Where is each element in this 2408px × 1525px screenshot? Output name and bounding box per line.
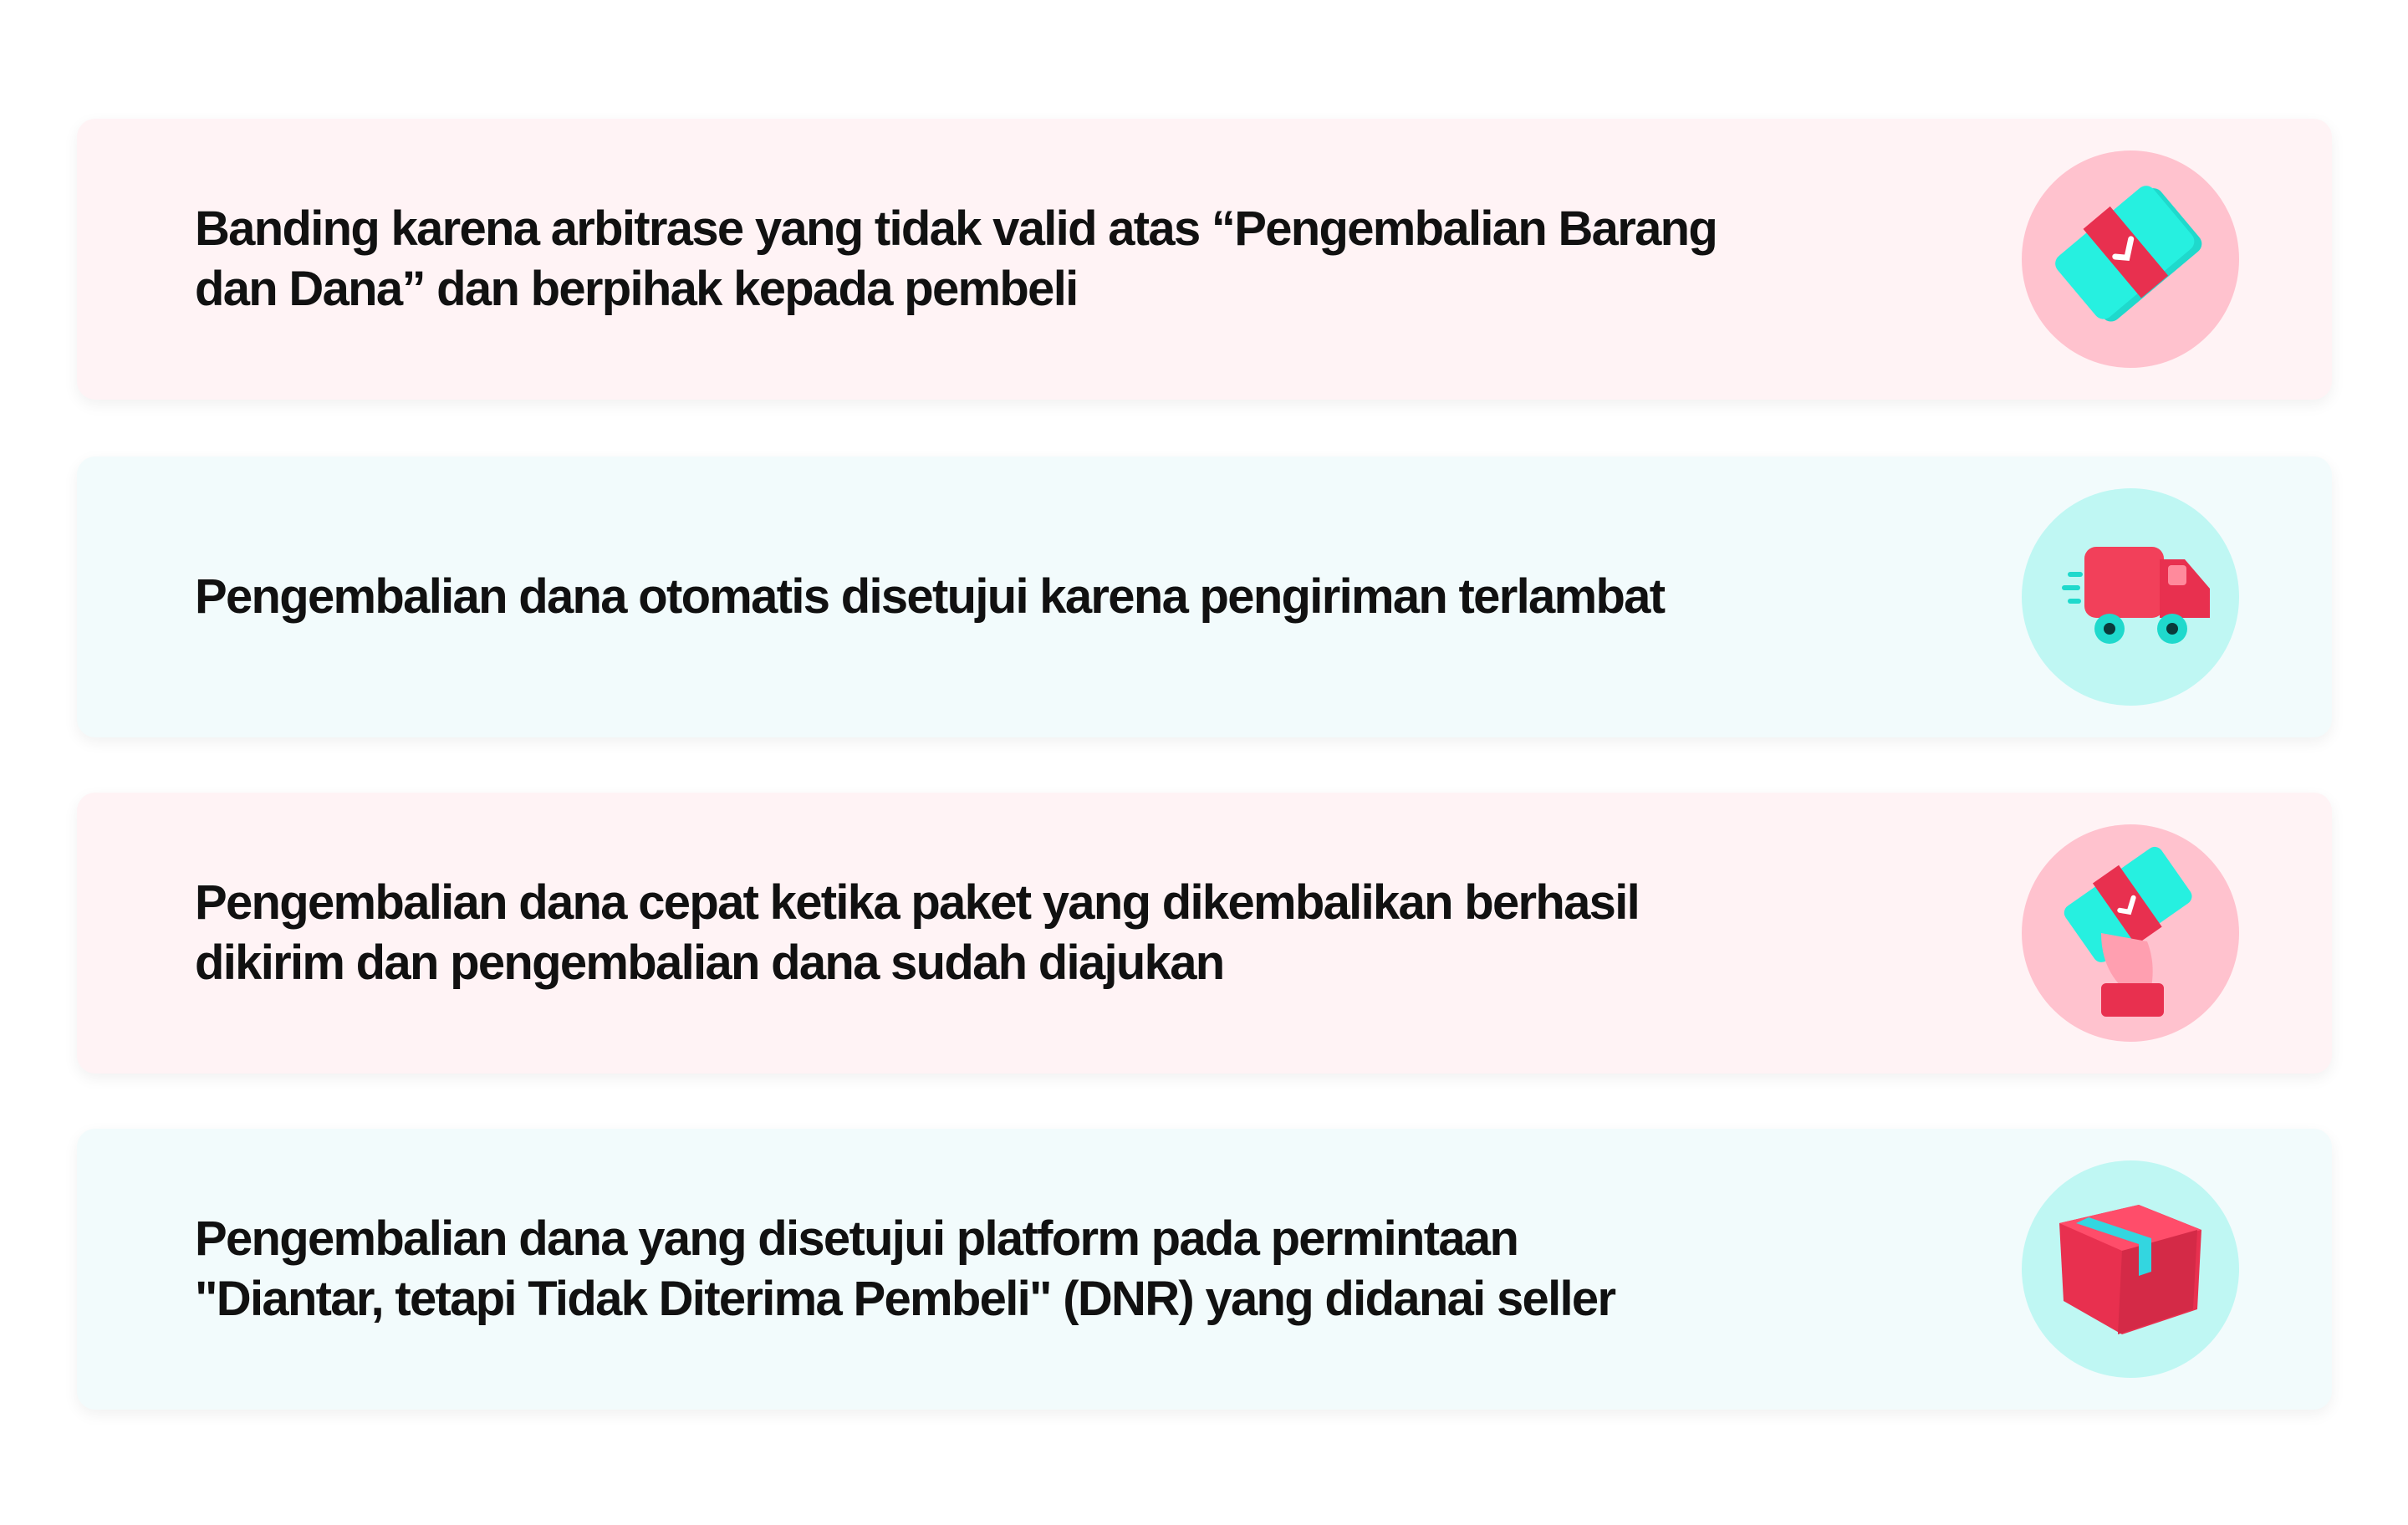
text block 3: dikirim dan pengembalian dana sudah diajukan: [195, 936, 1223, 990]
text block 1: [195, 201, 1717, 316]
icon: hand with money: [2022, 824, 2239, 1042]
text block 2: Pengembalian dana otomatis disetujui karena pengiriman terlambat: [195, 569, 1664, 624]
icon: box: [2022, 1160, 2239, 1378]
panel: card 1: [77, 119, 2332, 400]
text block 3: [195, 875, 1639, 990]
text block 4: Pengembalian dana yang disetujui platform pada permintaan: [195, 1211, 1518, 1266]
icon: truck: [2022, 488, 2239, 706]
panel: card 2: [77, 456, 2332, 737]
text block 1: dan Dana” dan berpihak kepada pembeli: [195, 262, 1078, 316]
text block 3: Pengembalian dana cepat ketika paket yang dikembalikan berhasil: [195, 875, 1639, 930]
text block 4: [195, 1211, 1615, 1326]
text block 4: "Diantar, tetapi Tidak Diterima Pembeli" (DNR) yang didanai seller: [195, 1272, 1615, 1326]
icon: money stack: [2022, 150, 2239, 368]
panel: card 3: [77, 793, 2332, 1074]
text block 1: Banding karena arbitrase yang tidak valid atas “Pengembalian Barang: [195, 201, 1717, 256]
panel: card 4: [77, 1129, 2332, 1410]
